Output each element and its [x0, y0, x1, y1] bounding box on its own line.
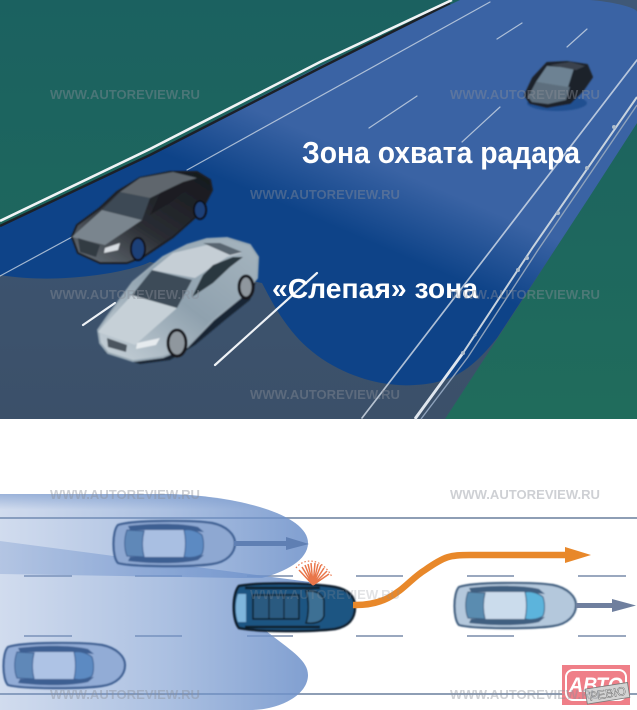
car: silver sedan	[98, 238, 258, 364]
panel: top-down diagram	[0, 494, 637, 710]
car: upper left	[114, 521, 235, 566]
watermarks: WWW.AUTOREVIEW.RU	[450, 287, 600, 302]
logo: Avtoreview: АВТО	[568, 674, 623, 697]
upper zone top shading	[0, 494, 295, 525]
watermarks: WWW.AUTOREVIEW.RU	[450, 487, 600, 502]
watermarks: WWW.AUTOREVIEW.RU	[250, 187, 400, 202]
radar coverage zone	[0, 0, 637, 385]
upper radar zone	[0, 494, 308, 578]
arrow: lane change path	[353, 547, 591, 605]
background grass	[0, 0, 637, 419]
car: front light car	[454, 583, 576, 628]
watermarks	[50, 87, 600, 702]
road edge lines	[0, 518, 637, 694]
arrow: front car direction	[576, 599, 636, 612]
left guardrail	[0, 0, 452, 226]
watermarks: WWW.AUTOREVIEW.RU	[50, 287, 200, 302]
car: own dark car	[234, 583, 355, 631]
arrow: upper car direction	[234, 537, 309, 550]
road markings	[0, 2, 637, 418]
panel: road perspective view	[0, 0, 637, 419]
label: radar coverage zone: Зона охвата радара	[302, 135, 581, 170]
lower radar zone	[0, 541, 310, 710]
label: blind zone: «Слепая» зона	[272, 273, 478, 304]
watermarks: WWW.AUTOREVIEW.RU	[450, 687, 600, 702]
watermarks: WWW.AUTOREVIEW.RU	[50, 87, 200, 102]
car: dark sedan	[72, 172, 212, 263]
watermarks: WWW.AUTOREVIEW.RU	[50, 687, 200, 702]
road surface	[0, 0, 637, 419]
car: lower left	[4, 643, 125, 688]
logo: Avtoreview	[562, 665, 630, 705]
watermarks: WWW.AUTOREVIEW.RU	[50, 487, 200, 502]
watermarks: WWW.AUTOREVIEW.RU	[450, 87, 600, 102]
logo: Avtoreview: РЕВЮ	[588, 684, 627, 704]
lane dashes	[24, 576, 626, 636]
car: far dark sedan	[525, 62, 592, 111]
watermarks: WWW.AUTOREVIEW.RU	[250, 587, 400, 602]
watermarks: WWW.AUTOREVIEW.RU	[250, 387, 400, 402]
icon: radar warning fan	[296, 561, 332, 585]
right guardrail	[415, 97, 637, 419]
